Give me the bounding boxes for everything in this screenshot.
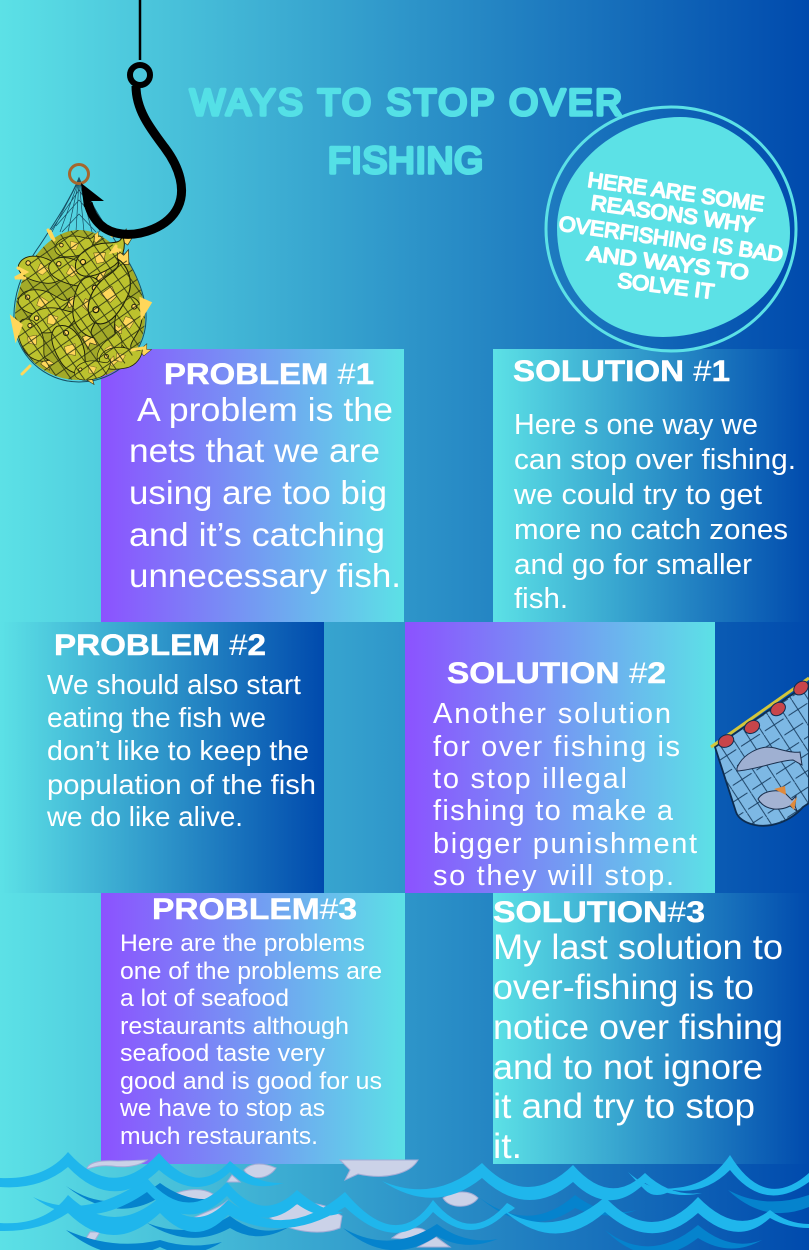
text: solution 1 body: fish. [514, 583, 568, 615]
text: solution 1 body: and go for smaller [514, 549, 752, 581]
text: solution 2 body: Another solution [433, 698, 671, 730]
text: problem 1 body: nets that we are [129, 432, 380, 469]
text: problem 2 body: we do like alive. [46, 801, 243, 832]
callout: reasons circle: REASONS WHY [590, 192, 756, 237]
text: solution 2 body: so they will stop. [433, 860, 674, 892]
text: problem 3 body: one of the problems are [120, 958, 382, 985]
text: solution 3 body: over-fishing is to [493, 968, 754, 1007]
callout: reasons circle: HERE ARE SOME [586, 169, 766, 216]
text: solution 3 body: notice over fishing [493, 1008, 783, 1047]
text: solution 1 body: we could try to get [513, 479, 762, 511]
heading: problem 1: PROBLEM #1 [164, 358, 374, 391]
callout: reasons circle [546, 107, 796, 351]
title: WAYS TO STOP OVER [190, 82, 622, 123]
text: problem 3 body [119, 930, 382, 1150]
text: solution 1 body: can stop over fishing. [514, 444, 796, 476]
panel: problem 1 [101, 349, 404, 622]
callout: reasons circle: SOLVE IT [616, 269, 715, 304]
text: problem 3 body: restaurants although [120, 1013, 349, 1040]
text: problem 2 body: We should also start [47, 669, 301, 700]
callout: reasons circle: OVERFISHING IS BAD [557, 212, 784, 267]
text: solution 2 body: for over fishing is [433, 731, 680, 763]
text: problem 1 body: unnecessary fish. [129, 557, 401, 594]
text: solution 3 body: it and try to stop [493, 1087, 755, 1126]
icon: fishing hook [81, 0, 182, 234]
heading: solution 3: SOLUTION #3 [493, 896, 705, 929]
panel: solution 2 [405, 622, 715, 893]
text: solution 1 body: Here s one way we [514, 409, 758, 441]
heading: problem 3: PROBLEM #3 [152, 893, 357, 926]
text: problem 1 body: using are too big [129, 474, 387, 511]
text: solution 1 body [513, 409, 796, 615]
waves [0, 1152, 809, 1250]
heading: solution 1: SOLUTION #1 [513, 355, 730, 388]
text: problem 3 body: much restaurants. [120, 1123, 318, 1150]
title: FISHING [328, 140, 483, 181]
silver fish fragments [85, 1160, 478, 1247]
panel: problem 3 [101, 893, 405, 1164]
text: problem 1 body: A problem is the [137, 391, 393, 428]
text: solution 3 body [493, 928, 783, 1166]
callout: reasons circle: AND WAYS TO [585, 242, 750, 285]
panel: problem 2 [0, 622, 324, 893]
text: problem 3 body: we have to stop as [119, 1095, 325, 1122]
text: problem 2 body: don’t like to keep the [47, 735, 309, 766]
text: problem 1 body [129, 391, 401, 594]
icon: fishing net with fish [711, 678, 809, 826]
icon: net bag of fish [12, 164, 153, 393]
text: problem 1 body: and it’s catching [129, 516, 385, 553]
text: solution 2 body: to stop illegal [433, 763, 627, 795]
text: problem 3 body: a lot of seafood [120, 985, 289, 1012]
text: solution 1 body: more no catch zones [514, 514, 788, 546]
text: solution 2 body: bigger punishment [433, 828, 697, 860]
text: problem 2 body: population of the fish [47, 769, 316, 800]
text: solution 3 body: My last solution to [493, 928, 783, 967]
text: solution 3 body: it. [493, 1127, 522, 1166]
text: problem 3 body: Here are the problems [120, 930, 365, 957]
title [190, 82, 622, 181]
heading: solution 2: SOLUTION #2 [447, 657, 666, 690]
text: problem 2 body [46, 669, 316, 832]
text: problem 3 body: good and is good for us [120, 1068, 382, 1095]
panel: solution 3 [493, 893, 809, 1166]
text: solution 2 body: fishing to make a [433, 795, 674, 827]
text: solution 3 body: and to not ignore [493, 1048, 763, 1087]
panel: solution 1 [493, 349, 809, 622]
text: solution 2 body [433, 698, 697, 892]
text: problem 2 body: eating the fish we [47, 702, 266, 733]
text: problem 3 body: seafood taste very [120, 1040, 325, 1067]
heading: problem 2: PROBLEM #2 [54, 629, 266, 662]
